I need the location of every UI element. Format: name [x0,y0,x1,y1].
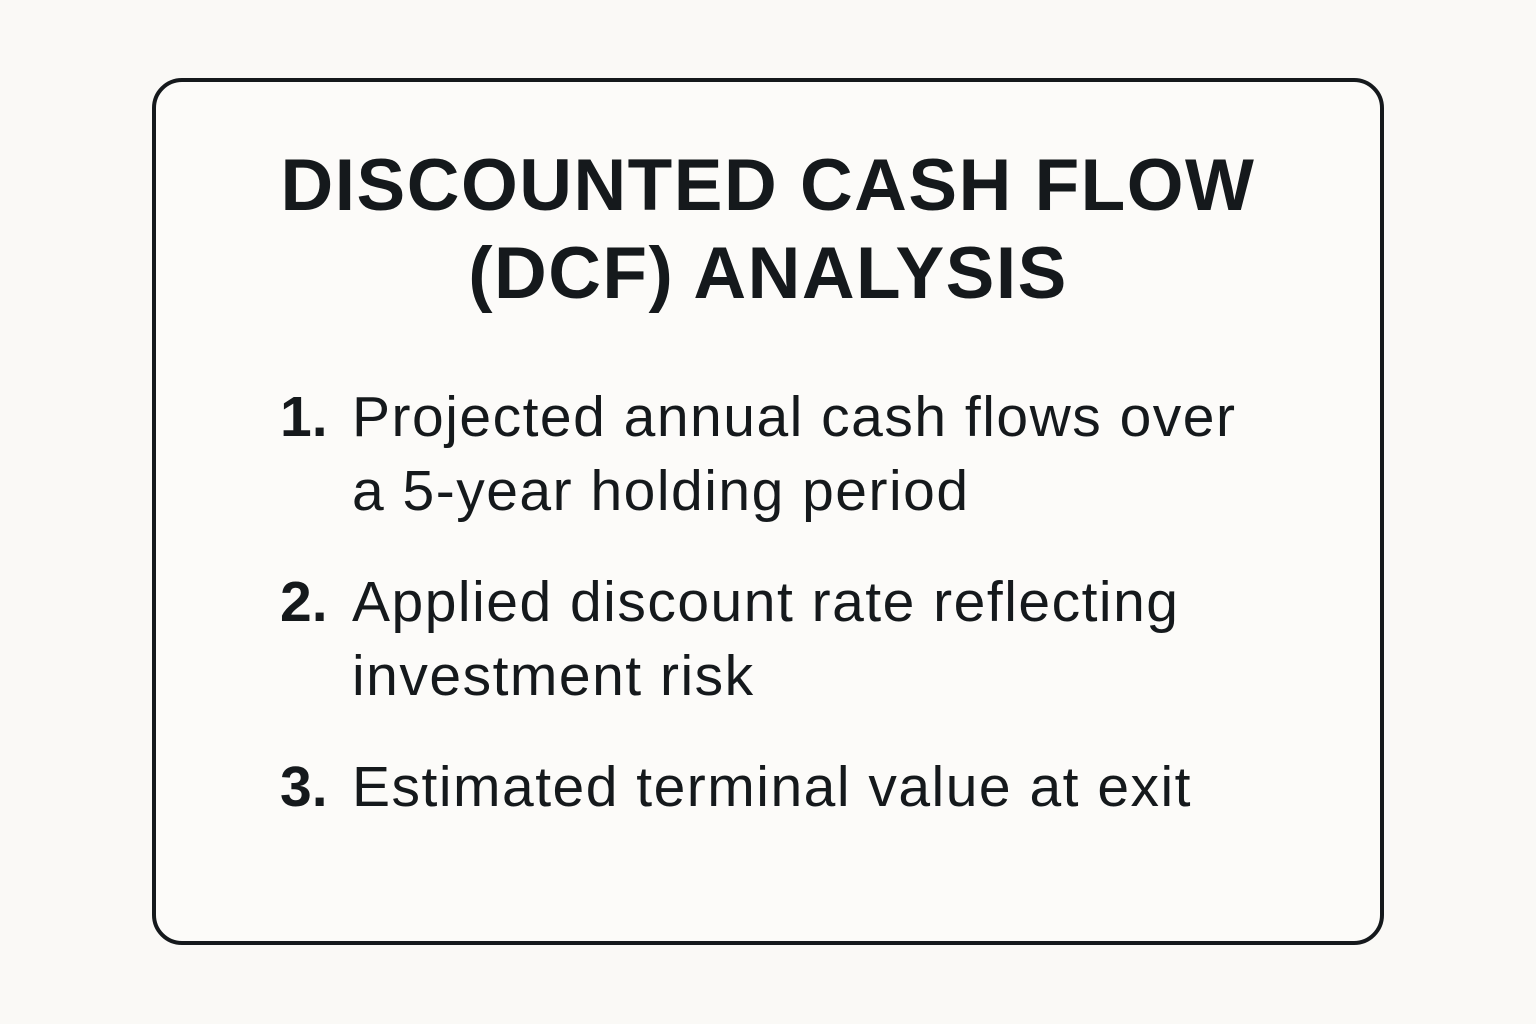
item 2: investment risk [352,644,755,708]
item 1 [280,385,1236,523]
title: DISCOUNTED CASH FLOW [281,145,1255,226]
item 1: a 5-year holding period [352,459,970,523]
panel: card [152,78,1384,945]
title: (DCF) ANALYSIS [468,233,1068,314]
item 3: 3. [280,755,328,819]
title [281,145,1255,314]
item 2 [280,570,1179,708]
item 2: Applied discount rate reflecting [352,570,1179,634]
item 3: Estimated terminal value at exit [352,755,1192,819]
item 2: 2. [280,570,328,634]
item 1: Projected annual cash flows over [352,385,1236,449]
item 1: 1. [280,385,328,449]
